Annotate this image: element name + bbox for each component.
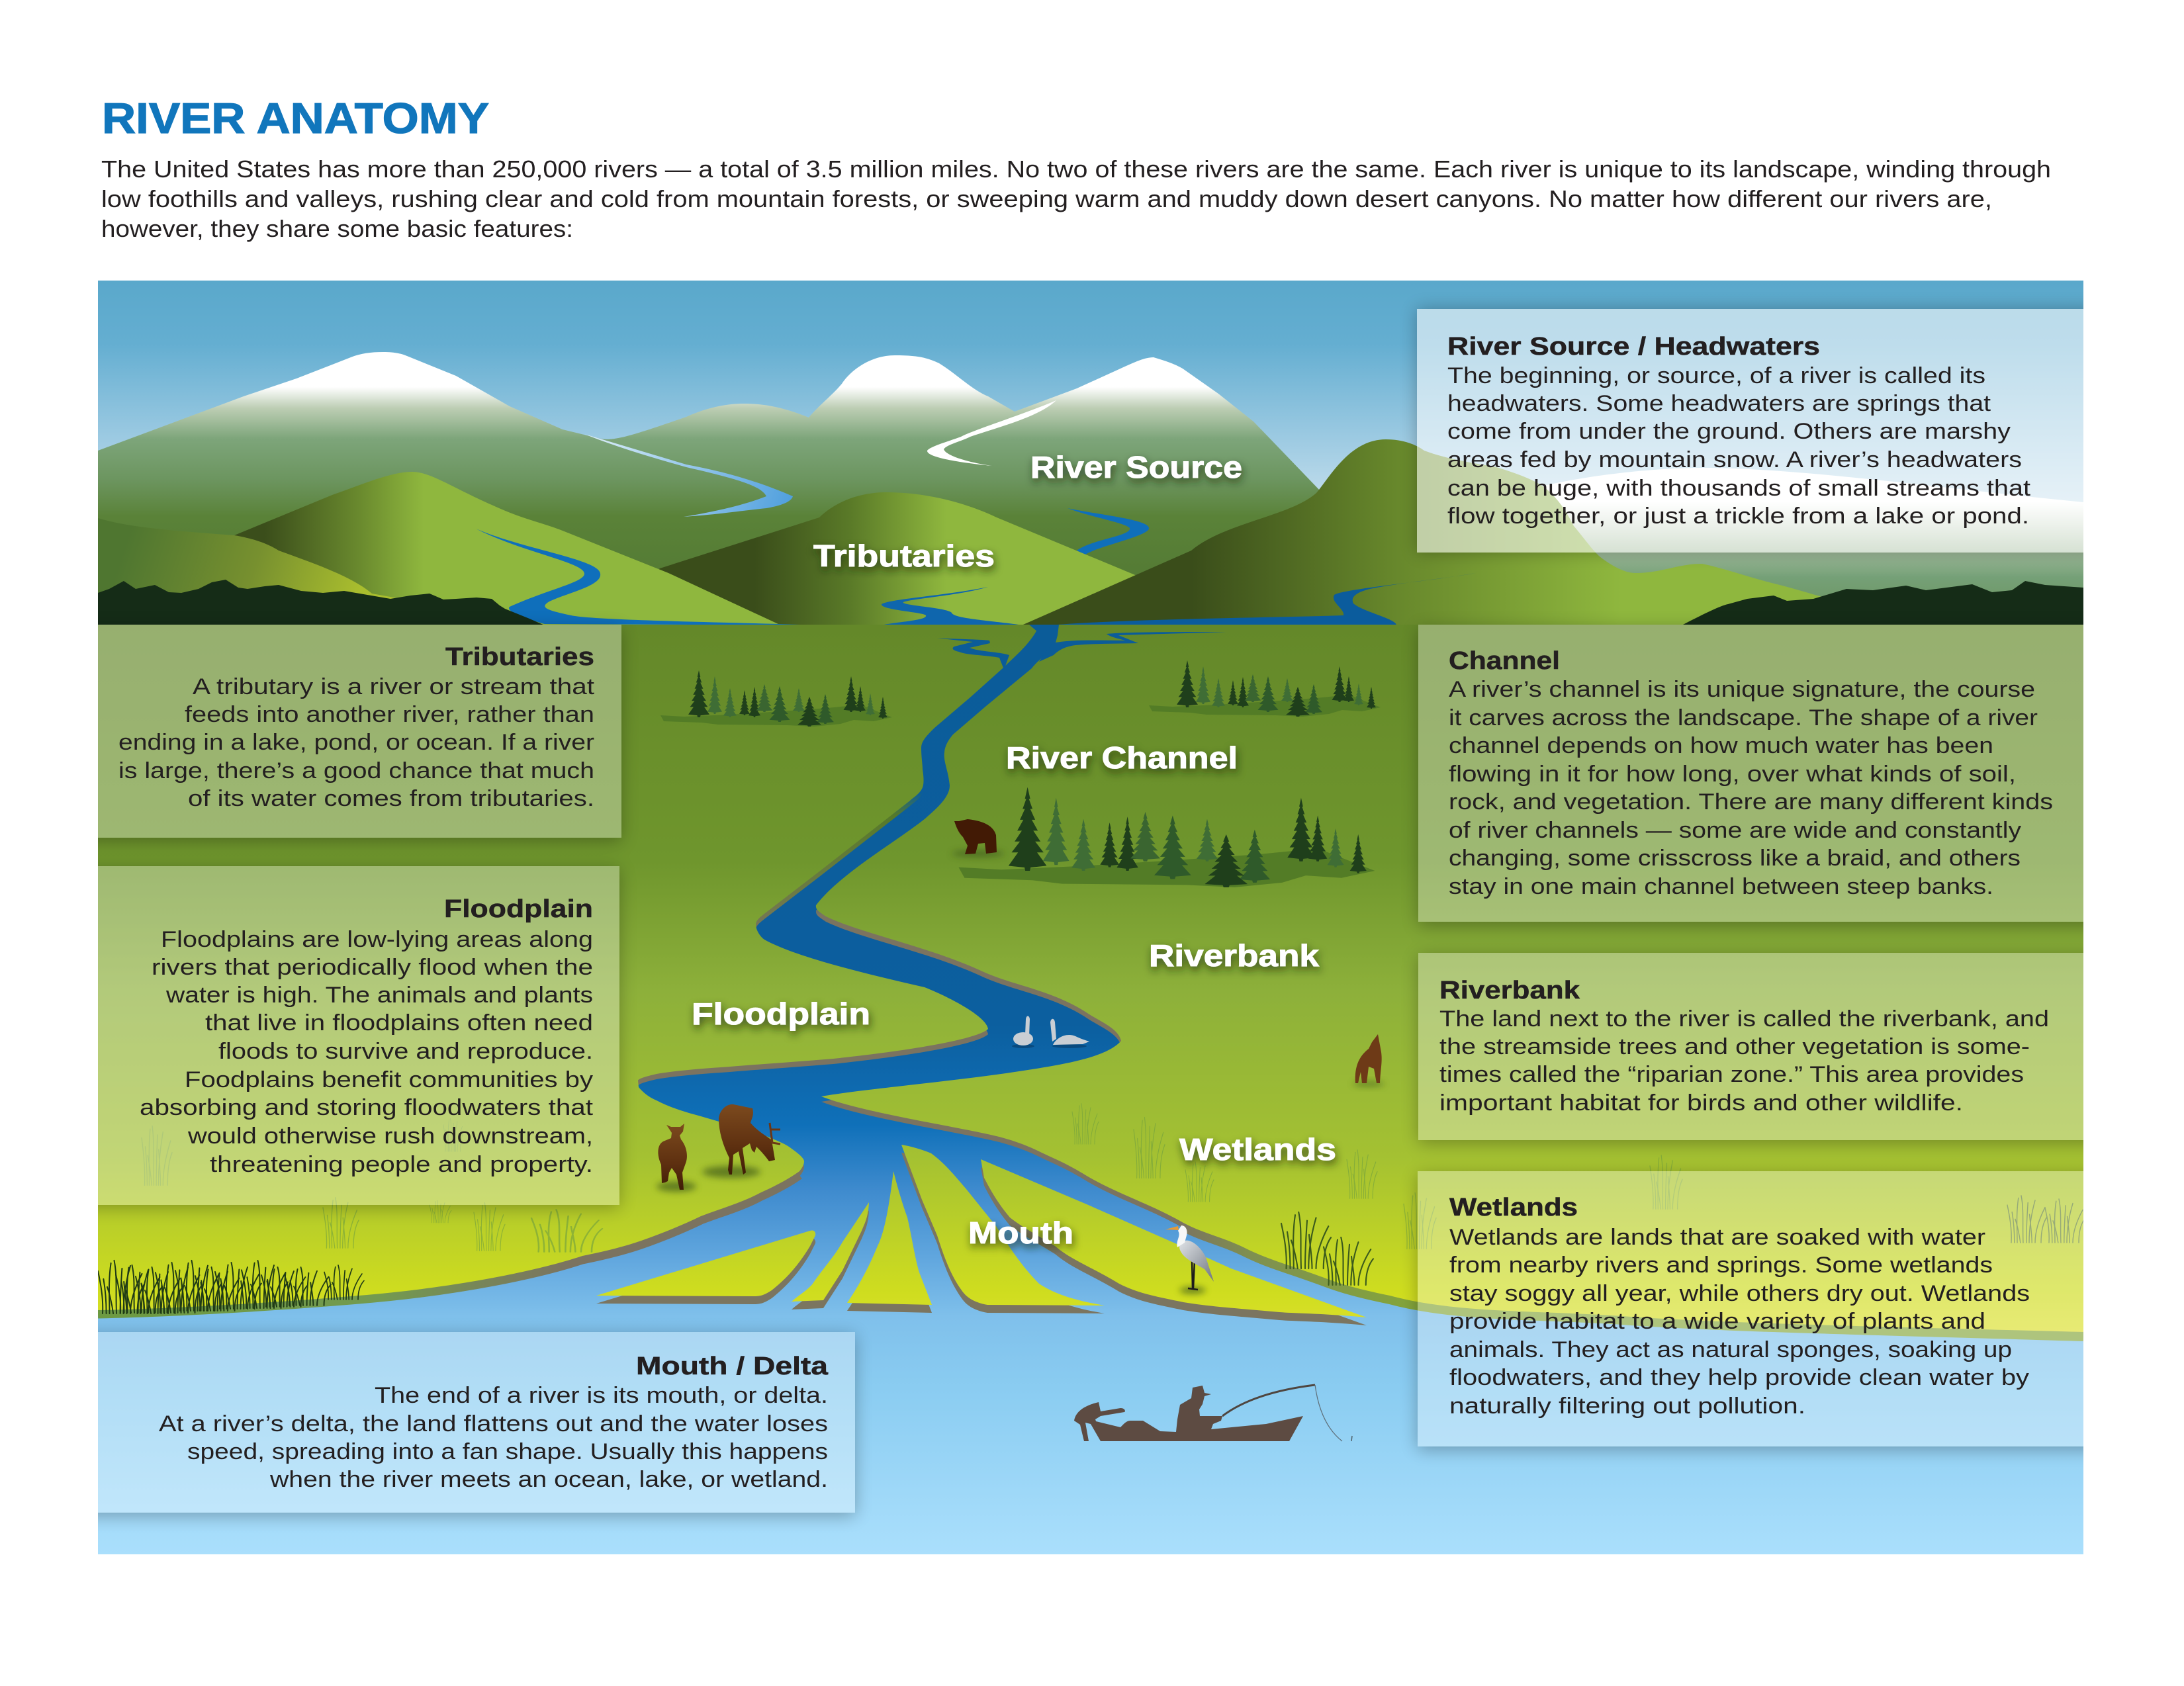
river stem and small tributaries xyxy=(937,625,1226,670)
intro text: however, they share some basic features: xyxy=(101,215,573,242)
distant right mountain xyxy=(1543,468,2083,597)
panel shadows xyxy=(79,309,2107,1516)
body xyxy=(118,674,595,811)
intro text: The United States has more than 250,000 rivers — a total of 3.5 million miles. No two of these rivers are the same. Each river is unique to its landscape, winding through xyxy=(101,155,2051,183)
right riverbank land xyxy=(816,625,2083,1332)
body: changing, some crisscross like a braid, and others xyxy=(1449,846,2021,871)
body: rivers that periodically flood when the xyxy=(152,955,593,980)
body: channel depends on how much water has been xyxy=(1449,733,1993,758)
heading: Mouth / Delta xyxy=(636,1353,829,1380)
tree line: right xyxy=(1682,581,2083,625)
body: can be huge, with thousands of small streams that xyxy=(1447,476,2031,501)
tributary: right hill xyxy=(1050,573,1476,625)
body: Floodplains are low-lying areas along xyxy=(161,927,593,952)
body: Wetlands are lands that are soaked with water xyxy=(1449,1225,1985,1250)
body: threatening people and property. xyxy=(210,1152,593,1177)
body: stay soggy all year, while others dry out. Wetlands xyxy=(1449,1281,2030,1306)
intro text: low foothills and valleys, rushing clear and cold from mountain forests, or sweeping warm and muddy down desert canyons. No matter how different our rivers are, xyxy=(101,185,1992,212)
forest: upper right xyxy=(1149,660,1381,717)
text: Mouth / Delta xyxy=(159,1353,829,1492)
text: Tributaries xyxy=(118,643,595,811)
body: At a river’s delta, the land flattens out and the water loses xyxy=(159,1411,828,1437)
body: headwaters. Some headwaters are springs that xyxy=(1447,391,1991,416)
body: A tributary is a river or stream that xyxy=(193,674,595,699)
panel: riverbank background xyxy=(1418,953,2083,1140)
icon: heron xyxy=(1165,1225,1214,1294)
text: Wetlands xyxy=(1449,1194,2030,1419)
body: areas fed by mountain snow. A river’s headwaters xyxy=(1447,447,2022,472)
body: provide habitat to a wide variety of plants and xyxy=(1449,1309,1985,1334)
body: A river’s channel is its unique signature, the course xyxy=(1449,677,2035,702)
grass: right dark reeds xyxy=(2007,1196,2085,1243)
body: feeds into another river, rather than xyxy=(185,702,594,727)
delta islands xyxy=(596,1145,1367,1325)
body: The end of a river is its mouth, or delta. xyxy=(375,1383,828,1408)
heading: Tributaries xyxy=(445,643,594,671)
label: River Source: River Source xyxy=(1030,450,1242,484)
tree line: left xyxy=(98,580,545,625)
body xyxy=(1447,363,2031,529)
middle hill xyxy=(659,492,1136,625)
title: RIVER ANATOMY xyxy=(102,94,489,142)
far-left foothill xyxy=(98,518,545,625)
label: River Channel: River Channel xyxy=(1006,740,1238,775)
body: it carves across the landscape. The shape of a river xyxy=(1449,705,2038,731)
body: animals. They act as natural sponges, soaking up xyxy=(1449,1337,2012,1362)
body: is large, there’s a good chance that much xyxy=(118,758,594,783)
body: ending in a lake, pond, or ocean. If a river xyxy=(118,730,594,755)
panel: river source background xyxy=(1417,309,2083,553)
body: important habitat for birds and other wildlife. xyxy=(1439,1090,1963,1116)
label: Riverbank: Riverbank xyxy=(1149,938,1319,973)
icon: deer xyxy=(657,1104,780,1192)
heading: Wetlands xyxy=(1449,1194,1578,1221)
snow-capped mountains xyxy=(98,352,1320,625)
body xyxy=(1439,1006,2049,1116)
body xyxy=(140,927,594,1177)
text: River Source / Headwaters xyxy=(1447,333,2031,529)
label: Floodplain: Floodplain xyxy=(692,997,870,1031)
grass: foreground reeds xyxy=(98,1261,364,1313)
body: times called the “riparian zone.” This area provides xyxy=(1439,1062,2024,1087)
body: naturally filtering out pollution. xyxy=(1449,1394,1805,1419)
left land bank edge xyxy=(98,630,1038,1315)
tributary: middle hill xyxy=(882,587,1023,625)
label: Wetlands: Wetlands xyxy=(1179,1132,1336,1167)
forest: central xyxy=(958,787,1375,887)
heading: River Source / Headwaters xyxy=(1447,333,1820,361)
icon: bear xyxy=(952,819,1005,857)
meltwater stream xyxy=(584,434,793,517)
sky xyxy=(98,281,2083,502)
body: The beginning, or source, of a river is called its xyxy=(1447,363,1985,388)
panel: wetlands background xyxy=(1418,1171,2083,1446)
heading: Floodplain xyxy=(444,895,593,923)
body: flowing in it for how long, over what kinds of soil, xyxy=(1449,762,2016,787)
body: flow together, or just a trickle from a lake or pond. xyxy=(1447,504,2029,529)
label: Tributaries: Tributaries xyxy=(813,539,995,573)
grass: wetlands reeds xyxy=(1281,1212,1373,1285)
label: Mouth: Mouth xyxy=(968,1216,1073,1250)
icon: wolf xyxy=(1353,1034,1385,1087)
body xyxy=(1449,677,2053,899)
text: Channel xyxy=(1449,647,2053,899)
body xyxy=(1449,1225,2030,1419)
right green hill xyxy=(1023,439,1893,625)
body: absorbing and storing floodwaters that xyxy=(140,1095,594,1120)
right land bank edge xyxy=(816,630,2083,1337)
tributary: left hill xyxy=(476,529,819,625)
left floodplain land xyxy=(98,625,1038,1310)
water: river and delta xyxy=(98,625,2083,1554)
body: the streamside trees and other vegetation is some- xyxy=(1439,1034,2030,1059)
icon: swans xyxy=(1012,1016,1089,1048)
body: of its water comes from tributaries. xyxy=(188,786,594,811)
forest: upper left xyxy=(660,670,892,727)
panel: mouth background xyxy=(98,1332,855,1513)
panel: tributaries background xyxy=(98,625,621,838)
body: Foodplains benefit communities by xyxy=(185,1067,593,1092)
body: that live in floodplains often need xyxy=(205,1010,593,1036)
body: come from under the ground. Others are marshy xyxy=(1447,419,2011,444)
body: of river channels — some are wide and constantly xyxy=(1449,818,2021,843)
body: floods to survive and reproduce. xyxy=(218,1039,593,1064)
body: stay in one main channel between steep banks. xyxy=(1449,874,1993,899)
body: from nearby rivers and springs. Some wetlands xyxy=(1449,1253,1993,1278)
body xyxy=(159,1383,828,1492)
body: when the river meets an ocean, lake, or wetland. xyxy=(269,1467,828,1492)
heading: Channel xyxy=(1449,647,1560,675)
text: Floodplain xyxy=(140,895,594,1177)
body: would otherwise rush downstream, xyxy=(187,1124,593,1149)
body: The land next to the river is called the riverbank, and xyxy=(1439,1006,2049,1032)
heading: Riverbank xyxy=(1439,977,1580,1004)
panel: channel background xyxy=(1418,625,2083,922)
icon: fisherman in boat xyxy=(1074,1385,1352,1441)
river source snow stream xyxy=(927,400,1056,466)
body: rock, and vegetation. There are many different kinds xyxy=(1449,789,2053,815)
left green hill xyxy=(199,472,780,625)
body: floodwaters, and they help provide clean water by xyxy=(1449,1365,2029,1390)
body: water is high. The animals and plants xyxy=(165,983,593,1008)
body: speed, spreading into a fan shape. Usually this happens xyxy=(187,1439,828,1464)
panel: floodplain background xyxy=(98,866,619,1205)
intro text xyxy=(101,155,2051,242)
text: Riverbank xyxy=(1439,977,2049,1116)
grass: pale reeds xyxy=(142,1104,1682,1252)
stream behind middle hill xyxy=(1068,508,1149,555)
illustration: river landscape xyxy=(79,281,2107,1554)
